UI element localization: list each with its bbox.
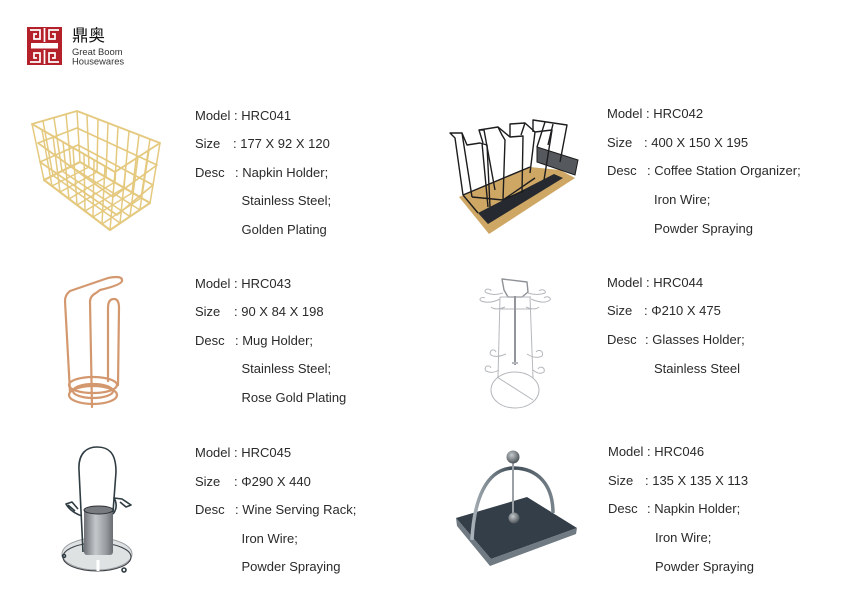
- spec text: Desc: [608, 501, 638, 516]
- spec text: Size: [608, 473, 633, 488]
- spec text: : Φ290 X 440: [234, 474, 311, 489]
- spec text: Size: [607, 135, 632, 150]
- spec text: Powder Spraying: [654, 221, 753, 236]
- spec text: Model : HRC044: [607, 275, 703, 290]
- logo mark: [27, 27, 62, 65]
- spec text: [608, 444, 754, 574]
- spec text: : Φ210 X 475: [644, 303, 721, 318]
- spec text: Rose Gold Plating: [242, 390, 346, 405]
- product image: black wire organizer on wood base: [450, 120, 578, 234]
- spec text: : 90 X 84 X 198: [234, 304, 324, 319]
- product: HRC044 glasses holder: [480, 275, 745, 408]
- spec text: Model : HRC043: [195, 276, 291, 291]
- logo English name line 2: Housewares: [72, 56, 124, 66]
- spec text: : Coffee Station Organizer;: [647, 163, 801, 178]
- logo Chinese name: 鼎奥: [72, 26, 105, 45]
- spec text: Stainless Steel;: [242, 361, 331, 376]
- product image: wine rack with bucket: [62, 447, 132, 572]
- spec text: Golden Plating: [242, 222, 327, 237]
- logo English name: Great Boom: [72, 46, 123, 57]
- spec text: : 135 X 135 X 113: [645, 473, 748, 488]
- product: HRC042 coffee station organizer: [450, 106, 801, 236]
- spec text: Desc: [607, 332, 637, 347]
- spec text: Size: [195, 136, 220, 151]
- spec text: Powder Spraying: [242, 559, 340, 574]
- product image: gold wire basket: [32, 111, 160, 230]
- spec text: [195, 445, 356, 574]
- spec text: : Napkin Holder;: [647, 501, 740, 516]
- spec text: Size: [195, 474, 220, 489]
- product: HRC043 rose gold mug holder: [65, 276, 346, 407]
- spec text: : 177 X 92 X 120: [233, 136, 330, 151]
- spec text: Iron Wire;: [654, 192, 710, 207]
- logo: [27, 26, 124, 66]
- spec text: Desc: [195, 165, 225, 180]
- product image: silver wire glasses rack: [480, 279, 550, 408]
- product: HRC045 wine serving rack: [62, 445, 356, 574]
- spec text: Model : HRC042: [607, 106, 703, 121]
- product image: slate napkin holder with ball pin: [456, 450, 577, 566]
- spec text: [607, 275, 745, 376]
- spec text: [195, 276, 346, 405]
- product: HRC046 napkin holder: [456, 444, 754, 574]
- spec text: Size: [607, 303, 632, 318]
- spec text: : 400 X 150 X 195: [644, 135, 748, 150]
- spec text: : Wine Serving Rack;: [235, 502, 356, 517]
- spec text: Desc: [195, 333, 225, 348]
- spec text: Size: [195, 304, 220, 319]
- spec text: : Napkin Holder;: [235, 165, 328, 180]
- spec text: [195, 108, 331, 237]
- spec text: Iron Wire;: [655, 530, 711, 545]
- product image: copper wire mug holder: [65, 277, 122, 407]
- spec text: Iron Wire;: [242, 531, 298, 546]
- spec text: Desc: [607, 163, 637, 178]
- spec text: Model : HRC046: [608, 444, 704, 459]
- spec text: Desc: [195, 502, 225, 517]
- spec text: Stainless Steel: [654, 361, 740, 376]
- spec text: [607, 106, 801, 236]
- spec text: Stainless Steel;: [242, 193, 331, 208]
- spec text: Model : HRC041: [195, 108, 291, 123]
- spec text: Powder Spraying: [655, 559, 754, 574]
- spec text: : Mug Holder;: [235, 333, 313, 348]
- product: HRC041 golden napkin holder: [32, 108, 331, 237]
- spec text: Model : HRC045: [195, 445, 291, 460]
- spec text: : Glasses Holder;: [645, 332, 745, 347]
